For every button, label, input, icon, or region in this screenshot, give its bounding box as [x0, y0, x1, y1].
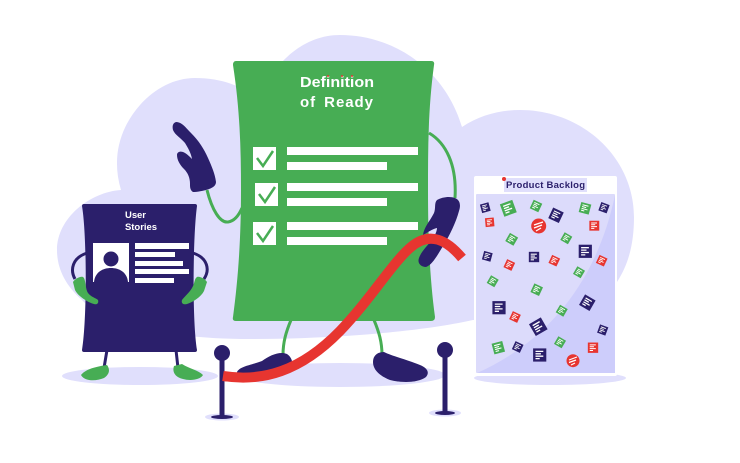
heading — [300, 74, 374, 111]
hand: raised left — [173, 122, 216, 192]
post: left — [205, 345, 239, 420]
profile photo — [93, 243, 129, 282]
hand: right — [418, 197, 460, 267]
shoe: left — [237, 353, 292, 377]
heading: Definition — [300, 74, 374, 91]
heading: Product Backlog — [506, 180, 585, 191]
heading — [502, 177, 587, 192]
backlog item: red circle bottom — [566, 354, 580, 367]
shoes — [81, 364, 203, 380]
checklist item 3 — [253, 222, 418, 245]
document — [233, 61, 435, 321]
document — [82, 204, 197, 352]
legs — [283, 320, 382, 355]
floor shadow: product backlog — [474, 371, 626, 385]
legs — [104, 350, 178, 368]
checklist item 2 — [255, 183, 418, 206]
arms — [207, 133, 455, 222]
character: definition of ready — [173, 61, 460, 382]
hands — [73, 277, 207, 304]
backlog cards: green — [487, 200, 591, 354]
heading: of Ready — [300, 94, 374, 111]
checklist item 1 — [253, 147, 418, 170]
backlog item: red circle top — [531, 218, 546, 234]
backlog cards: navy — [480, 202, 610, 362]
panel frame — [474, 176, 617, 376]
arms — [73, 253, 207, 279]
background cloud — [57, 35, 634, 339]
character: user stories: Stories — [125, 222, 157, 233]
panel: product backlog — [474, 176, 617, 376]
heading: User — [125, 210, 146, 221]
character: user stories — [73, 204, 207, 380]
floor shadow: definition of ready — [235, 363, 445, 387]
post: right — [429, 342, 461, 416]
red ribbon — [223, 239, 462, 378]
text lines — [135, 243, 189, 283]
panel shaded corner — [477, 195, 615, 373]
backlog cards: red — [485, 218, 608, 353]
floor shadow: user stories — [62, 367, 218, 385]
panel background — [476, 194, 615, 373]
shoe: right — [373, 352, 428, 382]
